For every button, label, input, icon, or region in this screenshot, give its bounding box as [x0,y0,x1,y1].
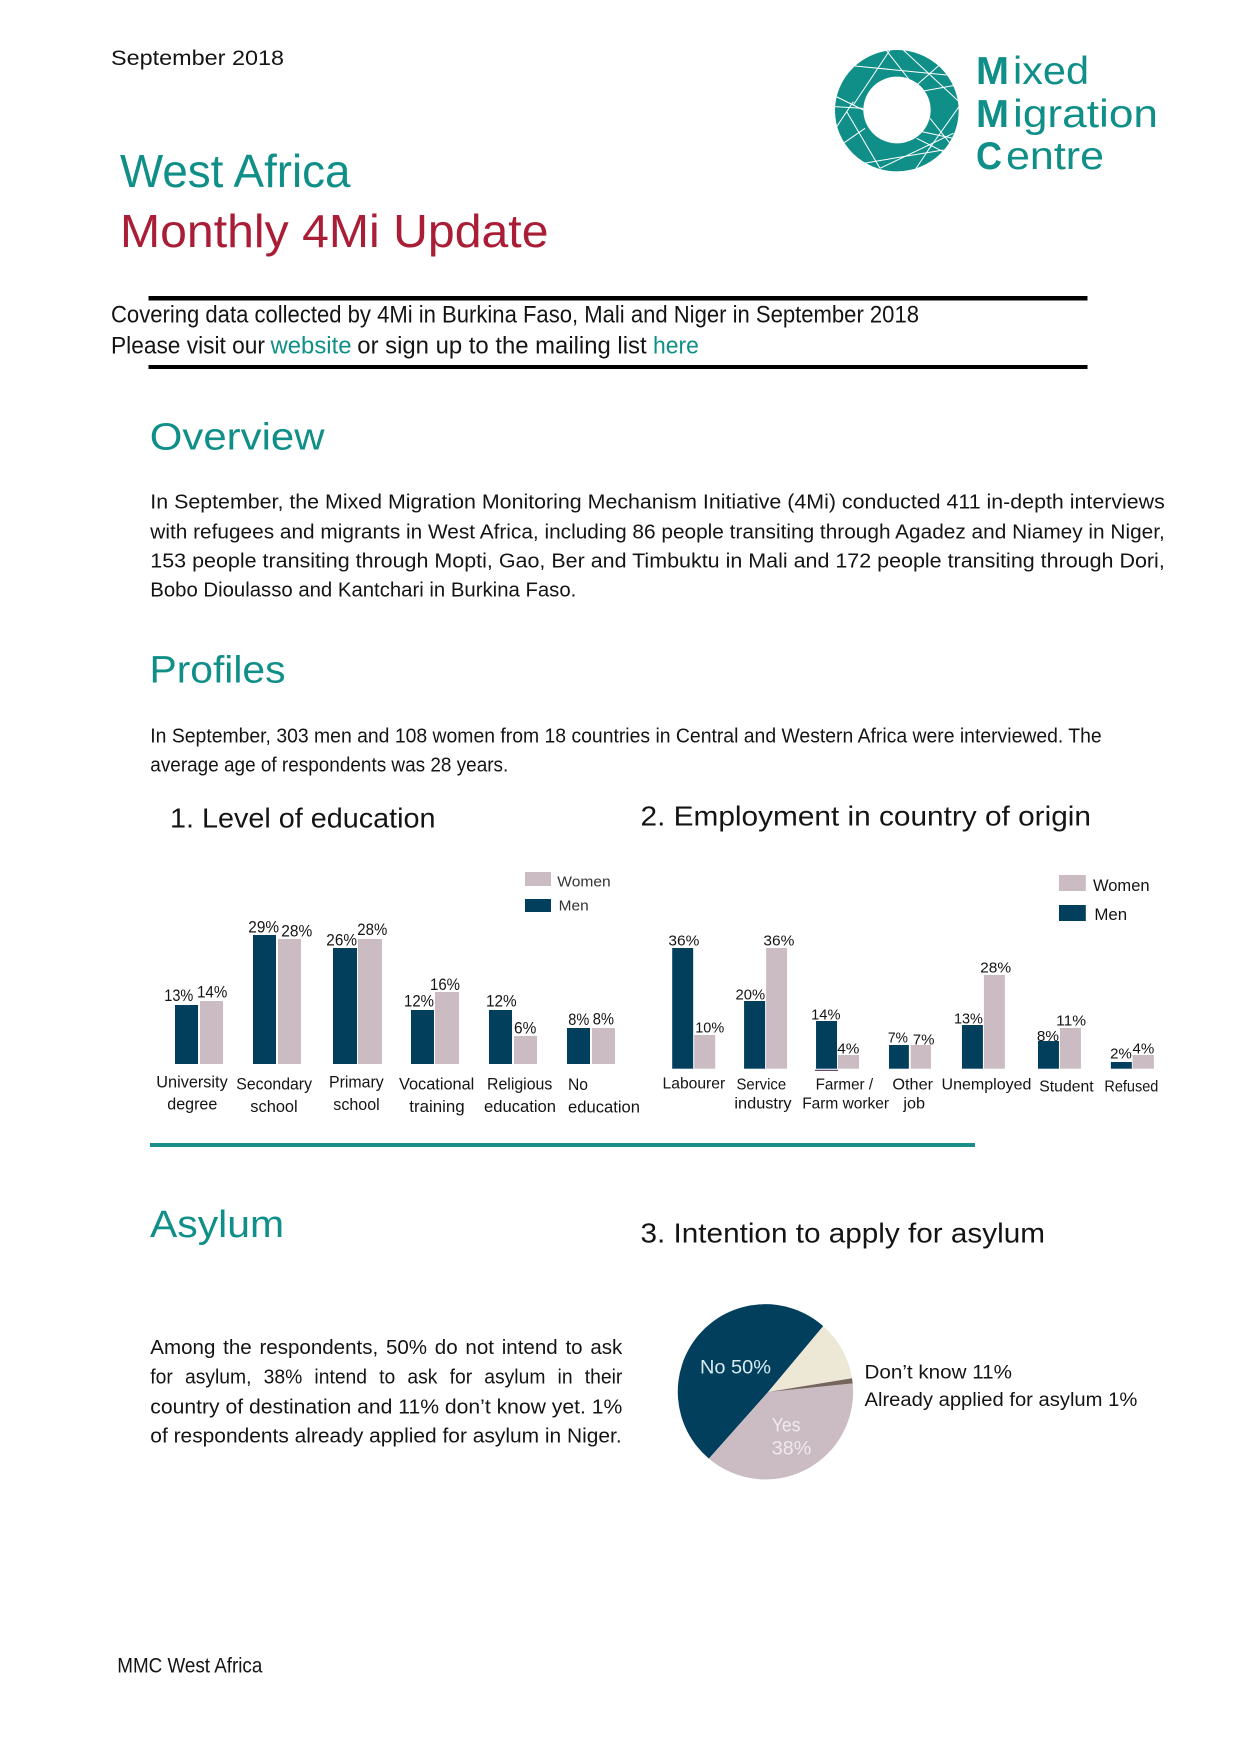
legend: employment chart: Men [1094,905,1127,924]
bars: Refused [1104,1040,1158,1095]
bars: Religious education: Religious [487,1074,552,1093]
bars: Vocational training: training [409,1097,465,1116]
overview paragraph: 153 people transiting through Mopti, Gao, Ber and Timbuktu in Mali and 172 people transiting through Dori, [150,550,1165,572]
bars: Labourer: 36% [668,932,699,949]
bars: Other job: 7% [888,1029,908,1046]
bars: Other job: job [902,1095,925,1112]
profiles paragraph: In September, 303 men and 108 women from 18 countries in Central and Western Africa were interviewed. The [150,725,1102,747]
logo: Mixed Migration Centre [835,50,1158,178]
slice: Yes 38% [709,1383,853,1479]
bars: Primary school: school [333,1095,380,1114]
legend: education chart: Men [559,898,589,915]
asylum paragraph: of respondents already applied for asylum in Niger. [150,1425,622,1447]
bars: No education: 8% [568,1010,589,1029]
bars: Service industry [734,932,794,1112]
coverage note [111,302,919,360]
title [120,145,548,257]
chart heading: Employment in country of origin: 2. Employment in country of origin [640,800,1091,831]
logo: Mixed Migration Centre: M [976,50,1009,93]
bars: Farmer / Farm worker: 4% [837,1040,859,1057]
overview paragraph [149,492,1165,602]
asylum paragraph [150,1337,623,1447]
logo: Mixed Migration Centre: ixed [1013,50,1089,93]
coverage note: here [653,332,699,360]
bars: Service industry: Service [737,1076,786,1093]
asylum paragraph: Among the respondents, 50% do not intend to ask [150,1337,623,1359]
logo: Mixed Migration Centre: M [976,93,1009,136]
bars: University degree: degree [167,1094,217,1114]
title: Monthly 4Mi Update [120,205,548,257]
bars: Vocational training: 16% [430,975,460,994]
heading: Overview: Overview [150,416,325,458]
bars: Vocational training [399,975,474,1116]
label: Don't know 11%: Don’t know 11% [864,1362,1012,1383]
bars: Refused: 4% [1133,1040,1154,1057]
bars: Farmer / Farm worker [802,1006,889,1112]
overview paragraph: with refugees and migrants in West Africa, including 86 people transiting through Agadez and Niamey in Niger, [149,521,1165,543]
bars: Farmer / Farm worker: Farmer / [816,1076,874,1093]
bars: Service industry: industry [734,1095,792,1112]
bars: Service industry: 36% [763,932,794,949]
title: West Africa [120,145,351,197]
bars: Labourer: 10% [695,1019,724,1036]
bars: No education: education [568,1098,640,1117]
bars: Other job [888,1029,934,1112]
bars: Secondary school: 29% [248,917,279,936]
bars: Secondary school: 28% [281,921,312,940]
bars: Secondary school: Secondary [236,1074,312,1093]
bars: University degree: 14% [197,982,227,1001]
label: Yes 38% [772,1416,811,1459]
bars: Religious education [484,991,556,1116]
logo: Mixed Migration Centre: entre [1006,135,1104,178]
bars: Primary school: Primary [329,1073,384,1092]
bars: University degree: University [156,1072,228,1091]
bars: Vocational training: 12% [404,991,434,1010]
bars: Secondary school: school [250,1097,298,1116]
bars: Refused: Refused [1104,1078,1158,1095]
footer: MMC West Africa [117,1654,263,1677]
bars: Religious education: 6% [514,1018,536,1037]
bars: Primary school [326,920,387,1114]
bars: Student [1037,1012,1094,1095]
overview paragraph: In September, the Mixed Migration Monitoring Mechanism Initiative (4Mi) conducted 411 in-depth interviews [150,492,1165,514]
bars: Primary school: 28% [357,920,387,939]
chart heading: Level of education: 1. Level of education [170,803,436,834]
coverage note: Covering data collected by 4Mi in Burkina Faso, Mali and Niger in September 2018 [111,302,919,328]
heading: Asylum: Asylum [150,1204,284,1246]
slice: Don't know 11% [768,1326,852,1392]
bars: Unemployed: Unemployed [942,1076,1031,1093]
bars: Labourer: Labourer [663,1075,725,1092]
slice: Already applied 1% [768,1378,853,1392]
bars: Primary school: 26% [326,930,357,949]
date: September 2018 [111,47,284,70]
icon: teal ring with crossing lines [835,50,959,171]
label: Already applied for asylum 1%: Already applied for asylum 1% [864,1390,1137,1411]
bars: Unemployed [942,959,1031,1093]
bar chart: level of education [156,872,640,1117]
label: Yes 38%: Yes [772,1416,800,1437]
pie chart: intention to apply for asylum [678,1304,1137,1479]
bars: Service industry: 20% [736,986,765,1003]
bars: Unemployed: 13% [954,1010,983,1027]
bars: Vocational training: Vocational [399,1074,474,1093]
bars: Secondary school [236,917,312,1116]
bars: No education [567,1009,640,1117]
bars: Unemployed: 28% [980,959,1011,976]
legend: employment chart: Women [1093,876,1150,895]
coverage note: or sign up to the mailing list [357,332,647,360]
legend: education chart: Women [557,874,611,891]
label: Yes 38%: 38% [772,1438,811,1459]
profiles paragraph: average age of respondents was 28 years. [150,755,508,777]
coverage note: Please visit our [111,332,265,360]
bars: Refused: 2% [1110,1045,1132,1062]
coverage note: website [270,332,352,360]
bars: Other job: Other [892,1076,933,1093]
bars: University degree: 13% [164,986,193,1005]
profiles paragraph [150,725,1102,777]
legend: education chart [525,872,611,915]
chart heading: Intention to apply for asylum: 3. Intention to apply for asylum [640,1217,1045,1248]
bars: Student: 11% [1056,1012,1086,1029]
bars: Student: Student [1039,1078,1094,1095]
overview paragraph: Bobo Dioulasso and Kantchari in Burkina Faso. [150,580,576,602]
logo: Mixed Migration Centre: C [976,135,1002,178]
bars: Other job: 7% [913,1031,934,1048]
bars: Religious education: education [484,1097,556,1116]
slice: No 50% [678,1304,823,1459]
bars: No education: 8% [593,1009,614,1028]
bars: Farmer / Farm worker: 14% [811,1006,840,1023]
legend: employment chart [1059,875,1150,924]
bars: Religious education: 12% [486,991,517,1010]
heading: Profiles: Profiles [150,649,286,691]
bars: No education: No [568,1075,588,1094]
label: No 50%: No 50% [700,1357,771,1378]
bars: University degree [156,982,228,1114]
bar chart: employment in country of origin [663,875,1158,1112]
bars: Student: 8% [1037,1028,1059,1045]
asylum paragraph: country of destination and 11% don’t know yet. 1% [150,1396,623,1418]
bars: Farmer / Farm worker: Farm worker [802,1095,889,1112]
bars: Labourer [663,932,725,1092]
asylum paragraph: for asylum, 38% intend to ask for asylum in their [150,1366,623,1388]
logo: Mixed Migration Centre: igration [1013,93,1158,136]
